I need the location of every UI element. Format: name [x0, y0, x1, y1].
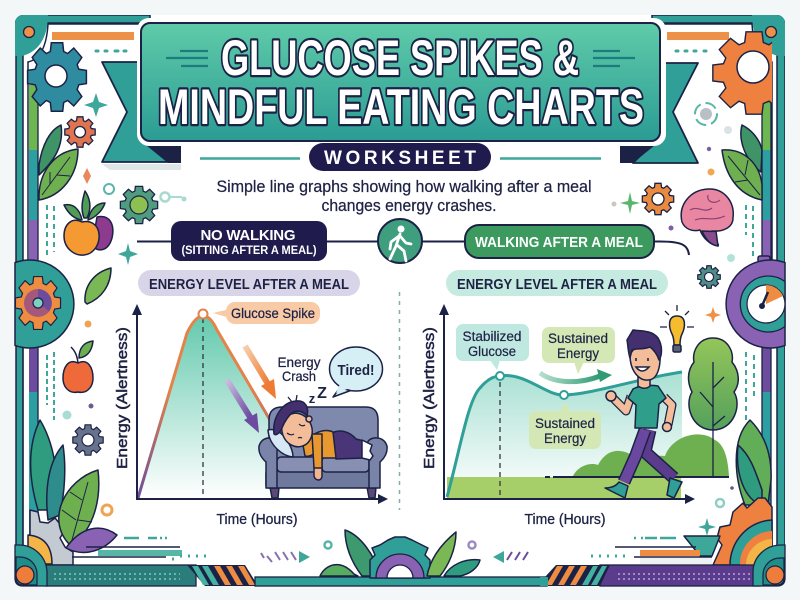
gear wheel: left middle: [15, 260, 74, 348]
cushion right: [322, 457, 369, 472]
axis label: time left: Time (Hours): [216, 511, 298, 528]
hair: [274, 401, 308, 435]
face: [636, 358, 649, 371]
axis arrow y: [132, 304, 142, 315]
leaves: upper right: [722, 125, 762, 200]
subtitle: [216, 177, 592, 215]
callout: sustained energy lower: [529, 402, 601, 449]
speech bubble: tired: [330, 347, 382, 397]
cowlick: [288, 395, 297, 402]
pillow: [268, 429, 293, 457]
snoring z letters: [309, 385, 327, 406]
heading: walking after a meal: WALKING AFTER A MEAL: [475, 234, 643, 251]
connector lines: [137, 242, 689, 255]
icon: lightbulb: [660, 305, 694, 352]
left arm outline: [613, 396, 631, 411]
snoring z letters: z: [309, 391, 316, 406]
area under curve: [138, 316, 275, 498]
sleeve: [312, 434, 322, 468]
gear: grey: [73, 425, 103, 455]
axis arrow y: [439, 304, 449, 315]
title line 1: GLUCOSE SPIKES &: [221, 30, 579, 86]
worksheet label: [200, 143, 601, 171]
back shoe: [667, 478, 682, 498]
decorative dots top right: [612, 51, 753, 262]
decorative dots lower left: [47, 320, 167, 538]
chart: no walking line graph: [132, 304, 388, 504]
label: energy crash: Energy: [278, 354, 320, 370]
heading: no walking: NO WALKING: [200, 227, 296, 244]
left fist: [606, 391, 616, 401]
axis label: time right: Time (Hours): [524, 511, 606, 528]
leaf: lower left small: [85, 268, 111, 304]
plateau dot: [560, 391, 568, 399]
icon: brain: [681, 189, 733, 246]
hair: [627, 330, 662, 360]
sofa base: [266, 470, 378, 488]
peak dot: [496, 372, 504, 380]
grass: [447, 477, 681, 498]
gear: small orange right: [642, 183, 674, 215]
banner fill: [141, 23, 660, 141]
arrow: bottom right dotted: [468, 542, 528, 563]
callout: sustained energy lower: Energy: [544, 431, 586, 446]
speed lines right: [593, 51, 635, 66]
icon: stopwatch: [726, 256, 785, 348]
illustration: walking man: [605, 330, 682, 498]
arrow: purple crash: [227, 380, 259, 433]
axis arrow x: [378, 494, 388, 504]
chart title: left: [138, 270, 360, 296]
label: energy crash: Crash: [282, 368, 316, 384]
gear: top right orange: [712, 31, 772, 115]
chart title: right: ENERGY LEVEL AFTER A MEAL: [457, 276, 657, 293]
hanging hand: [314, 466, 322, 480]
right ribbon tail: [620, 63, 698, 163]
worksheet label: WORKSHEET: [324, 148, 476, 169]
axis arrow x: [685, 494, 695, 504]
sofa legs: [270, 487, 376, 498]
head: [630, 345, 660, 380]
snoring z letters: Z: [317, 385, 327, 402]
subtitle: Simple line graphs showing how walking after a meal: [216, 177, 592, 196]
callout: stabilized glucose: Stabilized: [462, 329, 522, 344]
leaves: upper left: [39, 125, 78, 200]
peak guide: [202, 318, 204, 497]
heading: no walking: (SITTING AFTER A MEAL): [182, 245, 317, 257]
back leg: [645, 430, 674, 478]
callout: stabilized glucose: Glucose: [468, 344, 516, 359]
callout: sustained energy upper: Sustained: [548, 331, 608, 346]
front leg outline: [624, 430, 645, 482]
speech bubble: tired: Tired!: [338, 362, 374, 379]
gear: top left: [28, 43, 86, 111]
icon: peach and plum: [64, 191, 113, 255]
title banner: [102, 18, 698, 170]
callout: sustained energy upper: Energy: [557, 346, 599, 361]
energy curve: [447, 372, 682, 497]
heading: walking after a meal: [465, 225, 654, 258]
icon: walking person: [378, 219, 422, 263]
icon: apple: [63, 341, 93, 392]
left ribbon tail: [102, 62, 181, 170]
left arm: [613, 396, 631, 411]
axis label: energy right: Energy (Alertness): [421, 327, 438, 469]
callout: stabilized glucose: [456, 324, 529, 370]
arrow: sustained energy: [540, 369, 612, 382]
ear: [306, 416, 312, 422]
right arm outline: [664, 397, 672, 425]
peak marker: [198, 310, 208, 318]
illustration: sleeping boy on sofa: [259, 395, 387, 498]
speed lines left: [166, 51, 208, 66]
socks: [362, 440, 373, 460]
illustration: bush and ground: [545, 434, 729, 477]
callout: sustained energy lower: Sustained: [535, 416, 595, 431]
leaves and gear: bottom left corner: [15, 420, 547, 586]
axis label: energy left: Energy (Alertness): [114, 327, 131, 469]
banner body: [137, 18, 666, 146]
back leg outline: [645, 430, 674, 478]
glucose curve: [138, 316, 270, 498]
arrow: bottom left dotted: [261, 542, 332, 563]
front leg: [624, 430, 645, 482]
shirt: [303, 431, 336, 458]
sofa back: [269, 407, 378, 470]
arrow: orange crash: [245, 346, 276, 399]
callout: glucose spike: Glucose Spike: [231, 306, 315, 321]
arm left: [259, 438, 279, 488]
neck: [638, 375, 650, 388]
chart title: right: [446, 270, 668, 296]
title line 2: MINDFUL EATING CHARTS: [158, 79, 644, 135]
callout: glucose spike: [213, 302, 320, 324]
cushions: [277, 457, 321, 472]
gear: small orange left: [65, 117, 95, 147]
gear: small teal right: [698, 266, 720, 288]
gear and leaves: bottom centre: [320, 530, 480, 578]
chart: walking line graph: [439, 304, 695, 504]
face: [287, 424, 305, 438]
illustration: tree: [688, 338, 738, 476]
chart title: left: ENERGY LEVEL AFTER A MEAL: [149, 276, 349, 293]
callout: sustained energy upper: [542, 327, 615, 374]
decorative sparkles and dots left: [47, 51, 186, 265]
head: [277, 409, 317, 451]
gear: green: [120, 186, 158, 224]
arm right: [367, 438, 387, 488]
heading: no walking: [171, 221, 327, 261]
area under curve: [447, 372, 682, 497]
gear and leaves: bottom right corner: [540, 420, 785, 586]
peak guide: [499, 382, 501, 497]
axes: [137, 310, 382, 499]
pants: [330, 431, 364, 459]
front shoe: [605, 482, 628, 498]
torso: [628, 385, 666, 428]
label: energy crash: [278, 354, 320, 384]
center divider: [398, 292, 400, 510]
subtitle: changes energy crashes.: [322, 196, 496, 215]
right arm: [664, 397, 672, 425]
axes: [444, 310, 690, 499]
decorative shapes right: [698, 307, 754, 536]
right hand: [662, 422, 672, 432]
